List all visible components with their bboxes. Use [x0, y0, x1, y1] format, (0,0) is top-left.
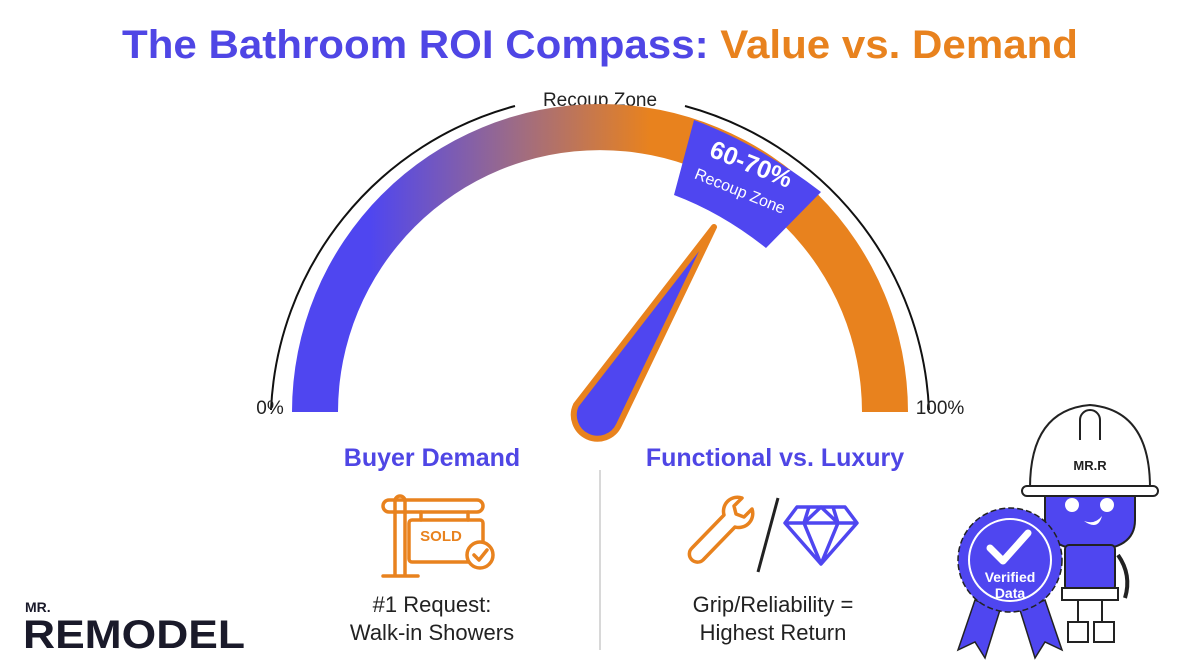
label 0%: 0%: [256, 398, 284, 419]
icon: verified badge: [958, 508, 1062, 658]
panel: buyer demand: Walk-in Showers: [350, 620, 514, 645]
logo: REMODEL: [23, 613, 245, 657]
icon: wrench: [689, 497, 753, 562]
slash: [758, 498, 778, 572]
logo: [23, 599, 245, 657]
panel: functional vs luxury: Highest Return: [700, 620, 846, 645]
panel: functional vs luxury: Grip/Reliability =: [693, 592, 853, 617]
needle: [574, 227, 714, 439]
logo: MR.: [25, 599, 51, 615]
panel: buyer demand: #1 Request:: [373, 592, 491, 617]
panel: functional vs luxury: [646, 444, 904, 645]
body: [1065, 545, 1115, 590]
badge 60-70%: 60-70%: [706, 135, 796, 194]
icon: diamond: [785, 507, 857, 564]
mascot robot: [1022, 405, 1158, 642]
gauge band: [292, 104, 908, 412]
badge 60-70%: Recoup Zone: [692, 166, 787, 218]
icon: sold sign: [383, 496, 493, 576]
title: The Bathroom ROI Compass: Value vs. Demand: [122, 23, 1078, 67]
panel: buyer demand: Buyer Demand: [344, 444, 520, 472]
icon: sold sign: SOLD: [420, 528, 462, 545]
label 100%: 100%: [916, 398, 964, 419]
head: [1045, 496, 1135, 550]
icon: verified badge: Data: [995, 585, 1025, 601]
panel: functional vs luxury: Functional vs. Luxury: [646, 444, 904, 472]
badge 60-70%: [674, 120, 821, 248]
gauge: [256, 90, 964, 439]
icon: verified badge: Verified: [985, 569, 1035, 585]
mascot robot: MR.R: [1073, 458, 1107, 473]
panel: buyer demand: [344, 444, 520, 645]
outer line: [271, 106, 929, 410]
label: recoup zone: Recoup Zone: [543, 90, 657, 111]
divider: [599, 470, 601, 650]
helmet: [1030, 405, 1150, 488]
